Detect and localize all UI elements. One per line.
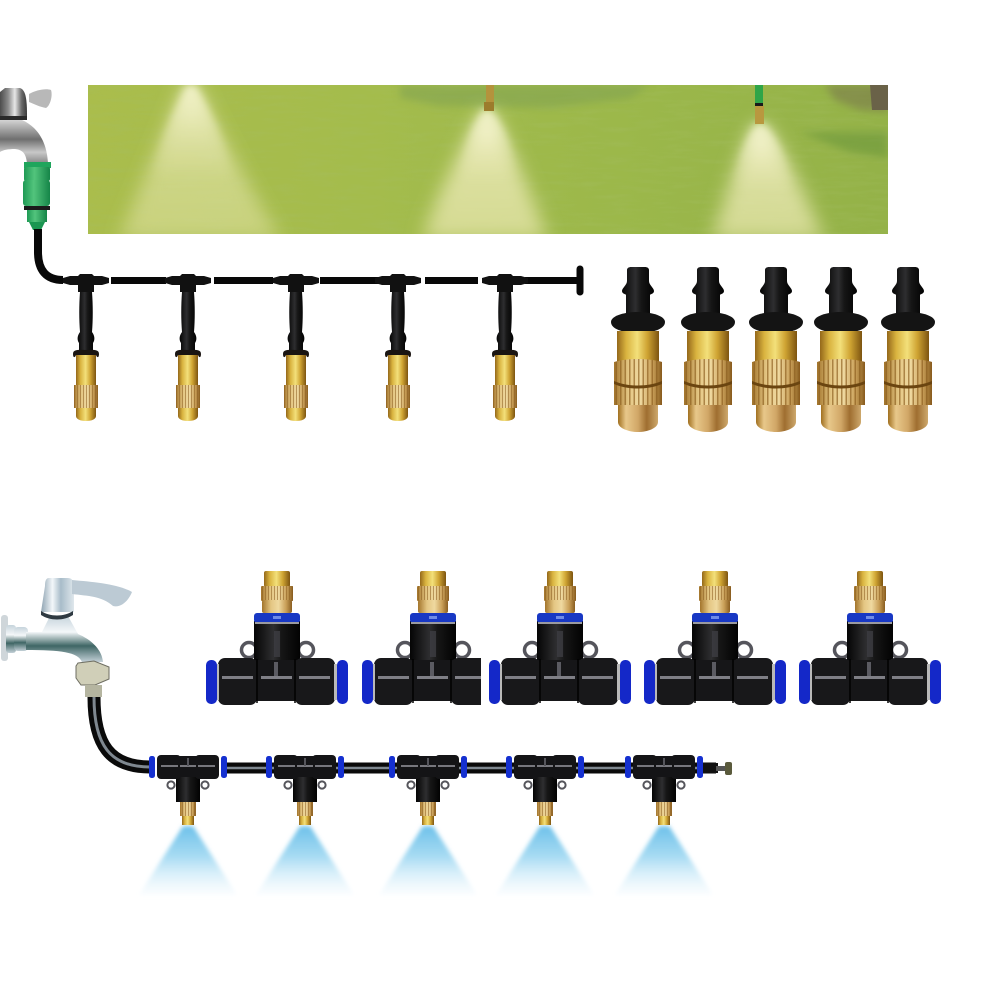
- bottom line tee fittings: [149, 755, 703, 825]
- photo: lawn with misting sprays: [88, 85, 888, 240]
- row of large tee fittings: [206, 571, 941, 705]
- spray 1: [118, 85, 282, 240]
- top branch assemblies: [63, 274, 528, 421]
- brass nozzle 3: [749, 267, 803, 432]
- row of large brass nozzles: [611, 267, 935, 432]
- spray 3: [712, 124, 825, 240]
- mist 2: [256, 826, 354, 895]
- mist 4: [496, 826, 594, 895]
- tee fitting 4: [644, 571, 786, 705]
- mist 1: [139, 826, 237, 895]
- assembly 2: [165, 274, 211, 421]
- mist 5: [615, 826, 713, 895]
- assembly 4: [375, 274, 421, 421]
- brass nozzle 2: [681, 267, 735, 432]
- spray 2: [422, 110, 548, 240]
- bottom black supply line: [94, 697, 716, 768]
- small tee 1: [149, 755, 227, 825]
- chrome lever tap: [1, 578, 132, 697]
- brass nozzle 5: [881, 267, 935, 432]
- tee fitting 3: [489, 571, 631, 705]
- infographic canvas: [0, 85, 941, 892]
- assembly 1: [63, 274, 109, 421]
- top tap with green connector: [0, 88, 52, 230]
- small tee 2: [266, 755, 344, 825]
- assembly 5: [482, 274, 528, 421]
- small tee 3: [389, 755, 467, 825]
- small tee 5: [625, 755, 703, 825]
- pipe end plug: [702, 762, 732, 775]
- tee fitting 1: [206, 571, 348, 705]
- assembly 3: [273, 274, 319, 421]
- mist 3: [379, 826, 477, 895]
- hanging nozzle 2: [484, 85, 494, 111]
- tee fitting 5: [799, 571, 941, 705]
- top black supply line: [38, 229, 580, 292]
- bottom mist cones: [139, 826, 713, 895]
- tee fitting 2: [362, 571, 481, 705]
- brass nozzle 1: [611, 267, 665, 432]
- small tee 4: [506, 755, 584, 825]
- hanging nozzle 3: [755, 85, 764, 124]
- brass nozzle 4: [814, 267, 868, 432]
